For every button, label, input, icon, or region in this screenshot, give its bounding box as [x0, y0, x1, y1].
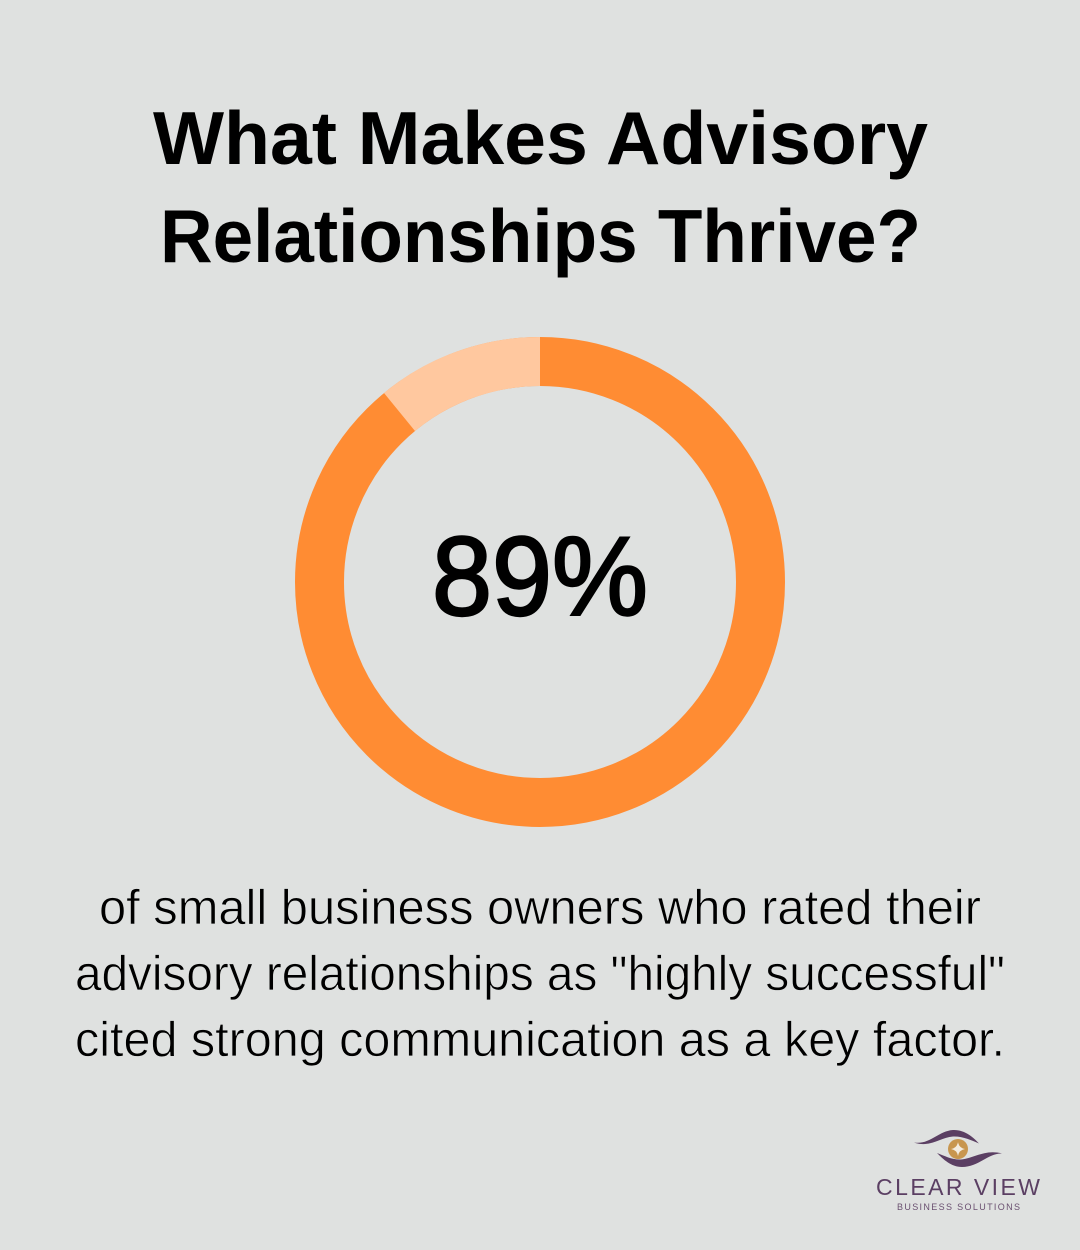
- title: Relationships Thrive?: [160, 194, 921, 278]
- donut chart: 89%: [320, 337, 760, 802]
- title: [153, 96, 928, 278]
- big number: 89%: [432, 514, 648, 639]
- description text: advisory relationships as "highly successful": [75, 947, 1005, 1001]
- logo tagline: BUSINESS SOLUTIONS: [897, 1202, 1020, 1212]
- logo: Clear View Business Solutions: [876, 1130, 1040, 1212]
- icon: eye mark: [914, 1130, 1002, 1167]
- description text: of small business owners who rated their: [99, 881, 981, 935]
- description text: cited strong communication as a key factor.: [75, 1013, 1005, 1067]
- description text: [75, 881, 1005, 1067]
- title: What Makes Advisory: [153, 96, 928, 180]
- logo name: CLEAR VIEW: [876, 1174, 1040, 1200]
